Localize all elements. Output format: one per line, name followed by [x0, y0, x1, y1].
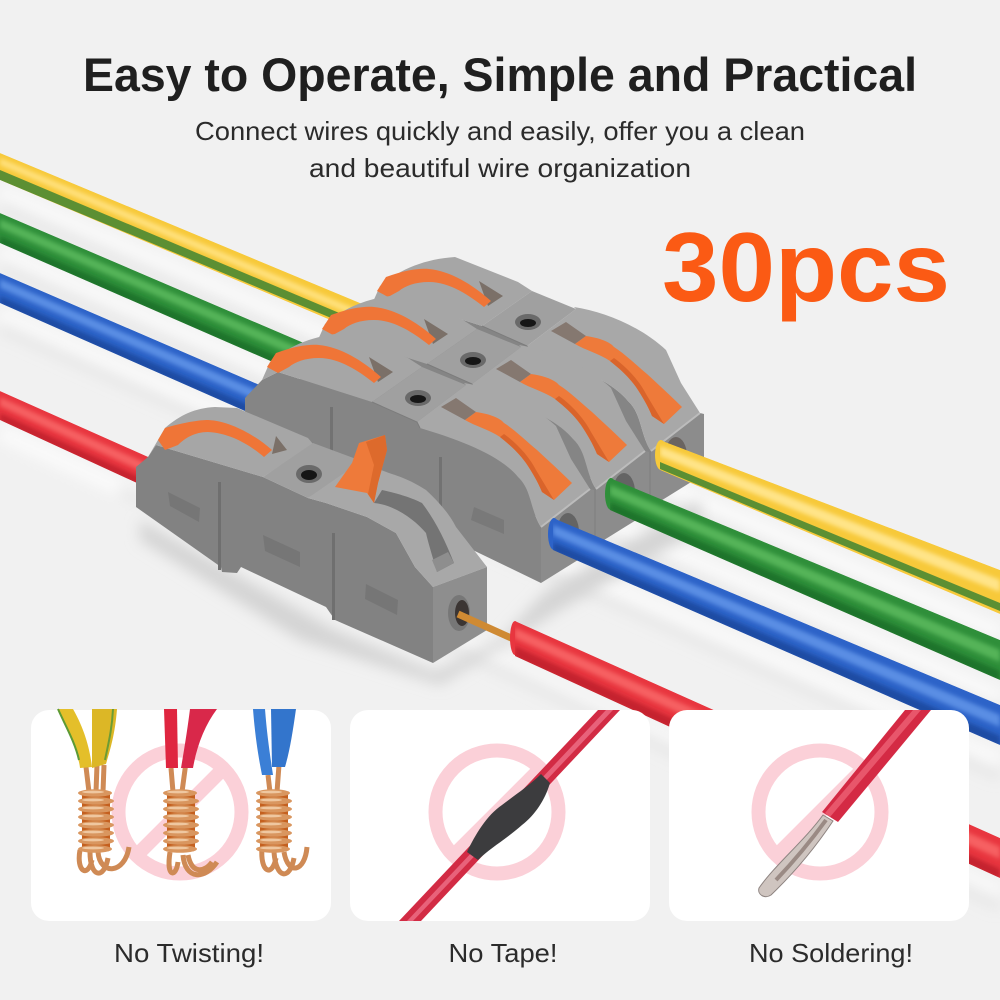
rear connector module 2: [300, 295, 649, 545]
rear connector module 3: [355, 257, 704, 507]
rear connector module 1: [245, 333, 594, 583]
green wire, left section: [0, 213, 302, 361]
blue wire entry hole: [557, 513, 579, 551]
raised lever: [335, 435, 387, 503]
yellow wire entry hole: [665, 437, 687, 475]
panel: no soldering: [669, 710, 969, 921]
end face: [433, 567, 487, 663]
green wire, right section: [610, 478, 1000, 682]
copper coils: [78, 789, 292, 853]
yellow wire, left section: [0, 153, 361, 319]
prohibition sign: [758, 750, 882, 874]
black tape: [467, 774, 550, 860]
title: Easy to Operate, Simple and Practical: [83, 48, 917, 101]
red wire, left section: [0, 391, 148, 482]
red wire, right section: [515, 621, 1000, 880]
lever slot: [374, 490, 454, 572]
connector ground shadow: [140, 500, 700, 685]
left lever tab: [158, 420, 272, 457]
wire entry hole: [448, 595, 470, 631]
rib: [439, 457, 442, 555]
side windows: [168, 492, 200, 522]
copper wire core: [458, 614, 520, 642]
subtitle: and beautiful wire organization: [309, 153, 691, 183]
red wires: [164, 709, 217, 768]
panel: no twisting: [31, 709, 331, 921]
blue wire, right section: [553, 518, 1000, 747]
yellow wires: [58, 709, 117, 768]
red wire: [822, 710, 931, 822]
top hole: [296, 465, 322, 483]
green wire rounded end: [605, 478, 617, 510]
yellow wire rounded end: [655, 440, 667, 470]
blue wires: [253, 709, 296, 775]
subtitle: [195, 116, 805, 183]
copper strands and tails: [79, 762, 307, 875]
red wire: [399, 710, 620, 921]
prohibition sign: [436, 750, 558, 874]
green wire entry hole: [613, 473, 635, 511]
ribs: [218, 482, 221, 570]
side window: [471, 507, 504, 534]
yellow wire, right section: [660, 440, 1000, 614]
top surface: right arc: [308, 462, 487, 587]
soldered tip: [759, 815, 833, 897]
front connector: [136, 407, 487, 663]
prohibition sign: [118, 750, 242, 874]
left lever slot: [272, 436, 287, 454]
blue wire, left section: [0, 273, 258, 411]
caption: no twisting: No Twisting!: [114, 938, 264, 968]
subtitle: Connect wires quickly and easily, offer you a clean: [195, 116, 805, 146]
caption: no soldering: No Soldering!: [749, 938, 913, 968]
red wire rounded end: [510, 621, 520, 655]
top surface: left arc: [148, 407, 313, 477]
callout: 30pcs: 30pcs: [662, 212, 950, 322]
blue wire rounded end: [548, 518, 560, 550]
top surface: hole plate: [263, 443, 367, 498]
panel: no tape: [350, 710, 650, 921]
caption: no tape: No Tape!: [448, 938, 558, 968]
side face: [136, 445, 433, 663]
